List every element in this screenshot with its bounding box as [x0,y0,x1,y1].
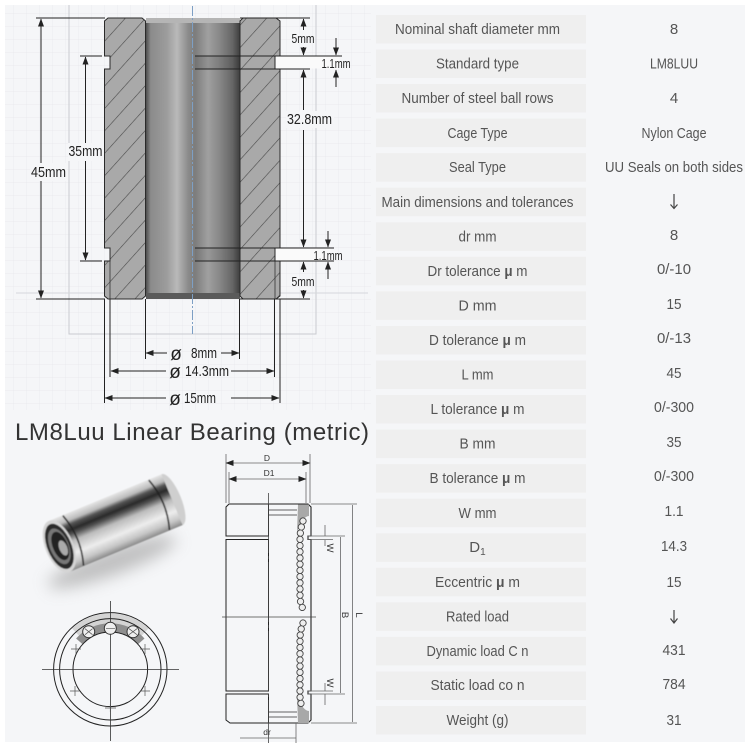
row values [605,21,743,729]
row labels: Nominal shaft diameter mm [395,21,560,38]
dimension: 1.1mm upper: 1.1mm [322,57,350,71]
dimension: L and B: L [353,612,364,618]
row values: 45 [666,365,682,382]
dimension: 35mm [68,56,104,261]
dimension: diameters: ø [170,344,182,365]
diagram: end view [42,601,179,741]
row values: 15 [666,574,682,591]
dimension: diameters: ø [169,362,181,383]
row labels: B mm [460,436,496,452]
dimension: D and D1: D [264,453,270,463]
row labels: D mm [458,298,496,314]
row labels: Standard type [436,56,519,72]
dimension: diameters [104,299,280,410]
row values: 8 [670,21,678,38]
dimension: 35mm: 35mm [68,144,102,160]
right bearing wall [240,18,280,299]
dimension: L and B [308,504,364,723]
row labels: D tolerance μ m [429,332,526,349]
row values: Nylon Cage [642,125,706,142]
row labels: W mm [458,505,496,522]
row values: 35 [666,434,682,451]
centerline [192,6,194,334]
row labels: B tolerance μ m [430,470,526,487]
row values: LM8LUU [650,56,698,72]
dimension: L and B: B [339,612,350,618]
row values: 4 [670,90,678,107]
dimension: 45mm: 45mm [31,165,66,181]
row labels: Static load co n [430,677,524,694]
dimension: 1.1mm upper [322,38,350,87]
dimension: diameters: 8mm [191,346,217,362]
dimension: right side lengths: 32.8mm [287,112,332,128]
steel balls [300,521,303,709]
row labels: Number of steel ball rows [402,90,554,107]
row labels: dr mm [458,228,496,246]
table: specifications [376,15,743,734]
row values: 14.3 [661,538,687,555]
dimension: diameters: 14.3mm [185,364,229,380]
row labels: D [469,539,480,556]
diagram: side view [222,453,364,743]
dimension: dr [240,723,296,743]
row values: 1.1 [664,503,684,520]
row values: 31 [666,712,682,729]
dimension: right side lengths [195,18,342,299]
dimension: W [308,525,335,705]
row labels: Dynamic load C n [426,643,528,660]
row values: 0/-300 [654,468,694,485]
dimension: D and D1: D1 [264,468,275,478]
dimension: right side lengths: 5mm [292,32,314,46]
dimension: 45mm [30,18,105,299]
row labels: L mm [462,366,494,384]
dimension: 1.1mm lower [314,231,342,279]
row values: 15 [666,296,682,313]
row labels: Weight (g) [446,712,508,729]
row values: 784 [662,676,686,693]
row labels: Dr tolerance μ m [428,263,528,280]
dimension: 1.1mm lower: 1.1mm [314,249,342,263]
row values: 0/-300 [654,399,694,416]
row values: 431 [662,642,686,659]
panel: section drawing [5,5,371,410]
dimension: diameters: ø [169,389,181,410]
row labels: Cage Type [448,125,508,142]
row labels: 1 [480,547,486,558]
dimension: W: W [324,544,335,553]
row values: 0/-13 [657,330,691,347]
photo: linear bearing [36,471,191,597]
row backgrounds [376,15,586,734]
row labels: Main dimensions and tolerances [382,194,574,211]
dimension: diameters: 15mm [184,391,216,407]
row values: 0/-10 [657,261,691,278]
row labels: Rated load [446,608,509,626]
dimension: dr: dr [263,727,271,737]
row labels: L tolerance μ m [430,401,524,418]
dimension: D and D1 [226,453,310,503]
row labels: Seal Type [449,159,506,176]
row labels: Eccentric μ m [435,574,520,591]
bearing bore [146,18,240,299]
dimension: W: W [324,679,335,688]
left bearing wall [104,18,146,299]
title: LM8Luu Linear Bearing (metric) [15,419,369,446]
dimension: right side lengths: 5mm [292,275,314,289]
row labels [382,21,574,729]
row values: 8 [670,227,678,244]
